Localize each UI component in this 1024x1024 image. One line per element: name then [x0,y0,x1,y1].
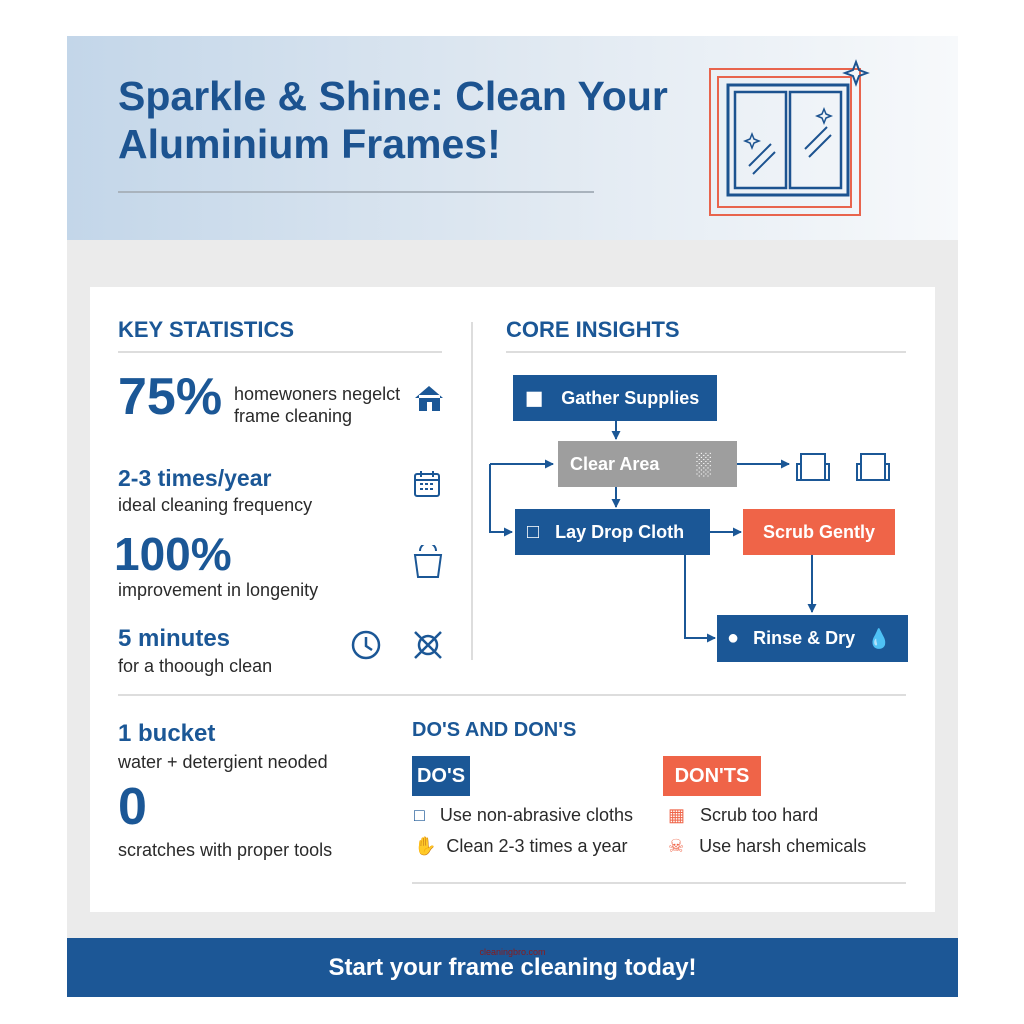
step: rinse & dry [717,615,908,662]
footer banner: Start your frame cleaning today! [328,954,697,981]
stat: 5 minutes: for a thoough clean [118,656,272,676]
stat: 75%: frame cleaning [234,406,352,426]
do's label [412,756,470,796]
stat: 100%: 100% [114,528,232,580]
step: clear area: ░ [695,451,711,476]
step: clear area [558,441,737,487]
panel: core insights: CORE INSIGHTS [506,317,680,342]
step: lay drop cloth [515,509,710,555]
step: gather supplies [513,375,717,421]
footer banner [67,938,958,997]
panel: key statistics: KEY STATISTICS [118,317,294,342]
step: rinse & dry: Rinse & Dry [753,628,855,648]
header [67,36,958,240]
step: lay drop cloth: Lay Drop Cloth [555,522,684,542]
footer banner: cleaningbro.com [479,947,546,957]
step: clear area: Clear Area [570,454,659,474]
panel: bottom stats [118,720,332,860]
stat: 2-3 times/year: ideal cleaning frequency [118,495,312,515]
stat: 5 minutes: 5 minutes [118,625,230,652]
panel: bottom stats: 1 bucket [118,720,215,747]
title: Sparkle & Shine: Clean Your [118,73,668,119]
step: scrub gently [743,509,895,555]
panel: dos and donts [412,719,906,884]
stat: 100% [114,528,442,600]
stat: 75%: homewoners negelct [234,384,400,404]
step: gather supplies: Gather Supplies [561,388,699,408]
grey background band [67,240,958,938]
do's label: DO'S [417,765,465,787]
main card [90,287,935,912]
stat: 75% [118,368,443,426]
stat: 2-3 times/year: 2-3 times/year [118,465,271,491]
title: Aluminium Frames! [118,121,501,167]
step: rinse & dry: ● [727,627,739,649]
panel: bottom stats: scratches with proper tools [118,840,332,860]
panel: core insights [489,317,908,662]
panel: dos and donts: ✋ Clean 2-3 times a year [414,836,628,856]
step: lay drop cloth: □ [527,520,539,542]
panel: dos and donts: DO'S AND DON'S [412,719,576,741]
stat: 2-3 times/year [118,465,440,515]
panel: bottom stats: 0 [118,778,147,836]
stat: 5 minutes [118,625,442,676]
icon: window [709,59,870,216]
step: scrub gently: Scrub Gently [763,522,875,542]
don'ts label [663,756,761,796]
stat: 100%: improvement in longenity [118,580,318,600]
do items: □ Use non-abrasive cloths [414,805,633,825]
panel: key statistics [114,317,443,676]
step: rinse & dry: 💧 [867,628,891,650]
panel: dos and donts: ☠ Use harsh chemicals [668,836,866,856]
flowchart [489,421,890,642]
stat: 75%: 75% [118,368,222,426]
dont items: ▦ Scrub too hard [668,805,818,825]
step: gather supplies: ◼ [525,385,543,410]
title [118,73,668,167]
don'ts label: DON'TS [675,765,749,787]
panel: bottom stats: water + detergient neoded [118,752,328,772]
